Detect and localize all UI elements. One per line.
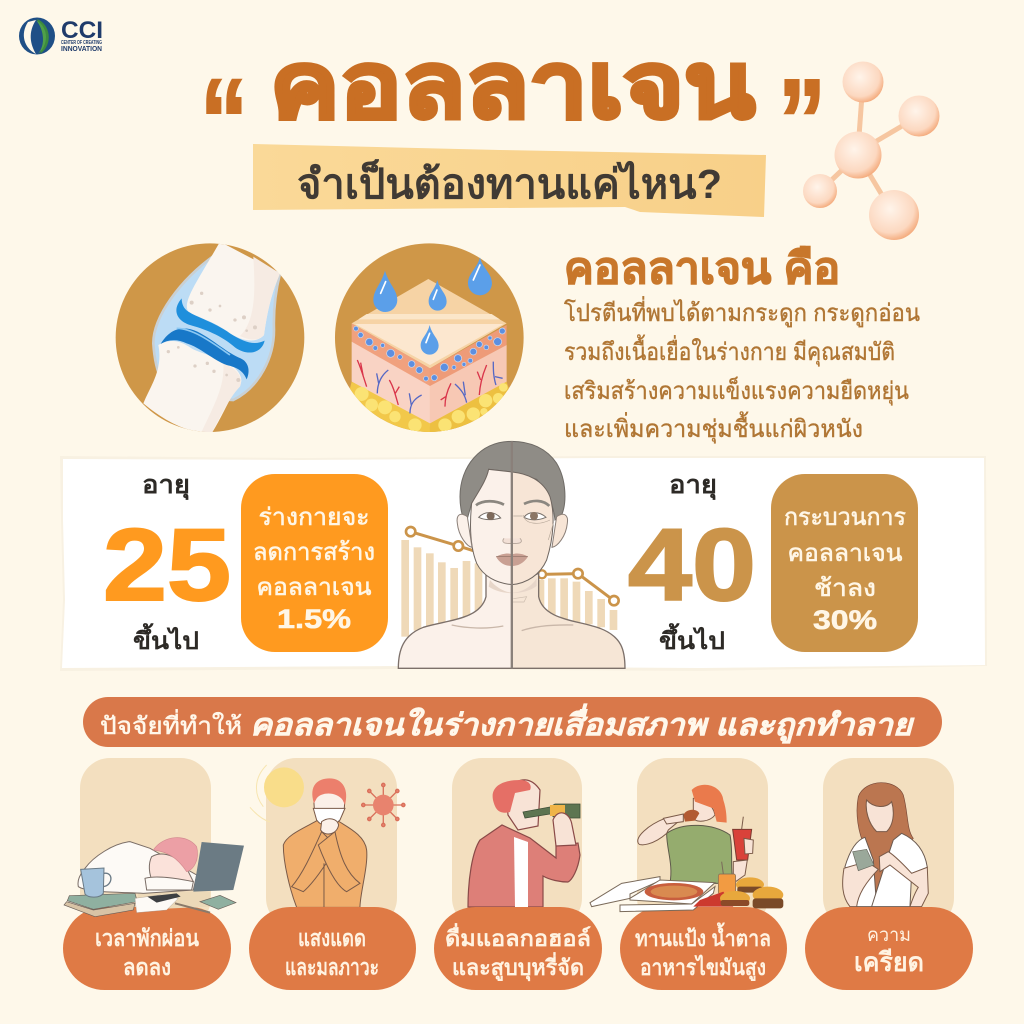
text block: collagen definition — [564, 296, 920, 444]
facial features — [452, 501, 573, 631]
callout: age 40: คอลลาเจน — [788, 540, 902, 567]
logo: CCI — [19, 17, 103, 54]
banner: factors heading: คอลลาเจนในร่างกายเสื่อมสภาพ และถูกทำลาย — [250, 703, 915, 744]
pill: less rest: ลดลง — [123, 954, 171, 980]
center divider — [511, 441, 513, 669]
banner: factors heading: ปัจจัยที่ทำให้ — [100, 709, 242, 740]
illustration: person eating — [590, 785, 783, 912]
hair — [460, 441, 565, 523]
body right half — [512, 573, 625, 668]
subtitle tape — [253, 144, 766, 217]
pill: alcohol and smoking: และสูบบุหรี่จัด — [452, 951, 584, 982]
callout: age 40: 30% — [813, 605, 877, 635]
text block: collagen definition: เสริมสร้างความแข็งแรงความยืดหยุ่น — [564, 376, 909, 406]
pill: sun and pollution: และมลภาวะ — [285, 954, 379, 980]
pill: sun and pollution: แสงแดด — [298, 925, 366, 951]
ears — [457, 514, 472, 547]
callout: age 25: คอลลาเจน — [256, 574, 372, 601]
pill: less rest: เวลาพักผ่อน — [95, 925, 199, 951]
text block: collagen definition: และเพิ่มความชุ่มชื้นแก่ผิวหนัง — [564, 411, 863, 444]
pill: sugary and fatty food — [620, 907, 787, 990]
pill: alcohol and smoking — [434, 907, 602, 990]
age 40 group: 40 — [628, 508, 756, 622]
illustration: face comparison with decline charts — [398, 441, 625, 669]
card: sugary and fatty food — [637, 758, 768, 928]
icon: molecule — [803, 62, 940, 240]
logo: CCI: CCI — [61, 17, 103, 44]
age 25 group: อายุ — [142, 471, 190, 501]
icon: skin layers — [335, 243, 527, 443]
card: sun and pollution — [250, 758, 405, 928]
logo: CCI: CENTER OF CREATING — [61, 40, 102, 46]
heading: collagen is: คอลลาเจน คือ — [564, 245, 840, 293]
title — [200, 35, 826, 187]
bar chart: left decline — [401, 527, 482, 637]
illustration: sleeping person — [64, 838, 244, 917]
callout: age 40: ช้าลง — [814, 575, 876, 602]
illustration: person with mask — [283, 778, 367, 907]
subtitle tape: จำเป็นต้องทานแค่ไหน? — [297, 159, 722, 207]
panel: aging comparison band — [60, 441, 987, 671]
callout: age 40: กระบวนการ — [784, 504, 906, 531]
body left half — [398, 573, 512, 668]
text block: collagen definition: โปรตีนที่พบได้ตามกระดูก กระดูกอ่อน — [564, 296, 920, 328]
title: “ — [200, 55, 248, 187]
pill: alcohol and smoking: ดื่มแอลกอฮอล์ — [445, 922, 591, 951]
pill: sugary and fatty food: อาหารไขมันสูง — [640, 954, 766, 982]
title: ” — [778, 55, 826, 187]
card: less rest — [80, 758, 211, 928]
callout: age 40 — [771, 474, 918, 652]
pill: sugary and fatty food: ทานแป้ง น้ำตาล — [635, 922, 771, 951]
text block: collagen definition: รวมถึงเนื้อเยื่อในร่างกาย มีคุณสมบัติ — [564, 334, 895, 367]
pill: stress: ความ — [867, 925, 911, 946]
bar chart: right decline — [538, 569, 619, 630]
age 25 group: ขึ้นไป — [133, 622, 199, 655]
icon: sun — [250, 765, 304, 822]
face left half — [470, 469, 512, 585]
callout: age 25: ร่างกายจะ — [258, 504, 370, 531]
age 40 group — [628, 471, 756, 655]
pill: stress — [805, 907, 973, 990]
icon: virus — [362, 783, 405, 827]
pill: stress: เครียด — [854, 947, 924, 977]
card: alcohol and smoking — [452, 758, 582, 928]
title: คอลลาเจน — [270, 35, 755, 137]
pill: sun and pollution — [249, 907, 416, 990]
card: stress — [823, 758, 954, 928]
age 25 group: 25 — [103, 508, 231, 622]
illustration: person drinking — [468, 780, 580, 907]
age 25 group — [103, 471, 231, 655]
age 40 group: อายุ — [669, 471, 717, 501]
pill: less rest — [63, 907, 231, 990]
age 40 group: ขึ้นไป — [659, 622, 725, 655]
illustration: woman on phone — [843, 783, 928, 907]
icon: joint — [116, 242, 304, 433]
callout: age 25: 1.5% — [277, 604, 351, 634]
callout: age 25 — [241, 474, 388, 652]
logo: CCI: INNOVATION — [61, 46, 102, 53]
face right half — [512, 472, 553, 585]
banner: factors heading — [83, 697, 942, 747]
callout: age 25: ลดการสร้าง — [253, 539, 375, 566]
